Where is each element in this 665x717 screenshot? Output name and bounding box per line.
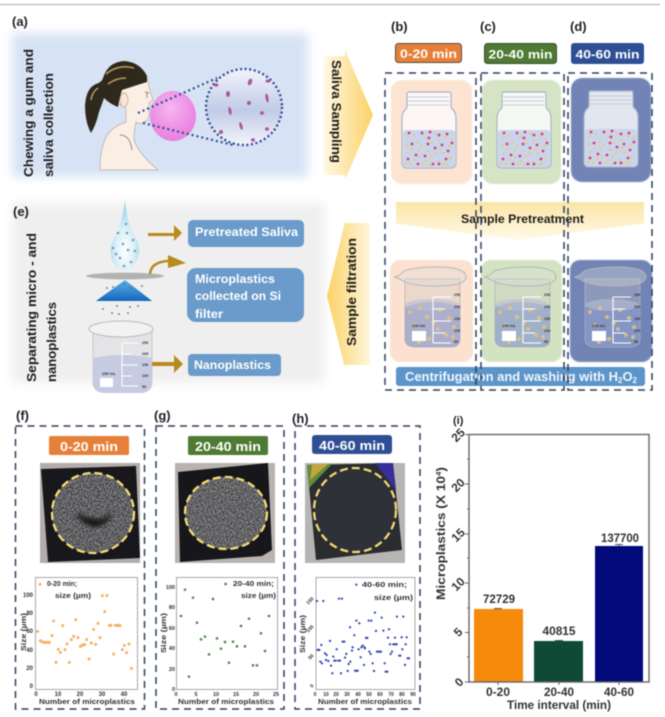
bar value labels: 72729 bbox=[483, 592, 515, 606]
scatter chart h: 100 bbox=[305, 624, 316, 634]
label (g): (g) bbox=[154, 408, 171, 423]
label (d): (d) bbox=[570, 19, 587, 34]
scatter chart g: 0 bbox=[174, 692, 178, 698]
x axis tick labels: 20-40 bbox=[544, 685, 574, 699]
scatter chart g bbox=[159, 578, 279, 706]
scatter chart f: 0 bbox=[30, 684, 34, 690]
icon: collection beaker: 100 bbox=[142, 374, 148, 378]
scatter chart h: 150 bbox=[305, 596, 316, 606]
scatter chart f bbox=[19, 578, 138, 706]
scatter chart g: 60 bbox=[169, 626, 175, 632]
scatter chart g: 25 bbox=[273, 692, 279, 698]
y axis tick labels: 20 bbox=[448, 475, 468, 495]
arrow: sample pretreatment: Sample Pretreatment bbox=[461, 212, 584, 226]
panel: sample c bbox=[480, 19, 562, 362]
panel: filter f bbox=[16, 408, 144, 709]
box: pretreated saliva bbox=[188, 220, 304, 247]
icon: collection beaker: 250 mL bbox=[102, 371, 116, 376]
scatter chart f: Size (µm) bbox=[19, 612, 28, 651]
arrow: to nanoplastics bbox=[152, 355, 183, 373]
scatter chart g: 80 bbox=[169, 605, 175, 611]
badge: 20-40 min: 20-40 min bbox=[195, 439, 261, 454]
scatter chart h: size (µm) bbox=[374, 593, 414, 602]
box: nanoplastics bbox=[188, 354, 281, 376]
scatter chart h: 20 bbox=[333, 692, 339, 698]
scatter chart g: 20 bbox=[169, 667, 175, 673]
arrow: sample filtration: Sample filtration bbox=[344, 238, 359, 346]
scatter chart f: 30 bbox=[99, 692, 106, 698]
heading: chewing a gum: Chewing a gum and bbox=[21, 49, 36, 177]
scatter chart h: 70 bbox=[388, 692, 394, 698]
icon: beaker c bbox=[484, 267, 556, 347]
label (f): (f) bbox=[16, 408, 29, 423]
scatter chart h: 0 bbox=[314, 692, 317, 698]
bar value labels: 137700 bbox=[601, 531, 639, 545]
box: pretreated saliva: Pretreated Saliva bbox=[195, 225, 298, 239]
photo: filter h bbox=[305, 463, 405, 563]
background: jar b bbox=[391, 80, 472, 184]
scatter chart f: 80 bbox=[26, 611, 34, 617]
scatter chart g: 20-40 min; bbox=[233, 581, 274, 588]
badge: 40-60 min: 40-60 min bbox=[319, 438, 385, 453]
icon: beaker d bbox=[574, 267, 646, 347]
bar: centrifugation and washing: 2 bbox=[633, 376, 638, 385]
scatter chart g: 15 bbox=[233, 692, 239, 698]
box: nanoplastics: Nanoplastics bbox=[194, 358, 271, 372]
scatter chart h: 90 bbox=[410, 692, 416, 698]
scatter chart f: 40 bbox=[121, 692, 128, 698]
scatter chart g: Size (µm) bbox=[159, 612, 168, 653]
panel: sample d bbox=[570, 19, 652, 362]
y axis tick labels bbox=[448, 425, 468, 689]
scatter chart f: 10 bbox=[55, 692, 62, 698]
icon: gum bubble bbox=[150, 91, 196, 141]
y axis title: Microplastics (X 10 bbox=[434, 491, 448, 600]
y axis tick labels: 0 bbox=[452, 675, 467, 689]
label (c): (c) bbox=[480, 19, 496, 34]
y axis tick labels: 25 bbox=[448, 425, 468, 445]
data points h bbox=[317, 585, 409, 673]
dashed box d bbox=[568, 73, 652, 390]
badge: 20-40 min: 20-40 min bbox=[488, 48, 552, 62]
badge: 40-60 min: 40-60 min bbox=[576, 48, 640, 62]
x axis tick labels: 0-20 bbox=[486, 685, 510, 699]
scatter chart f: 40 bbox=[26, 648, 34, 654]
scatter chart h: 40-60 min; bbox=[362, 580, 407, 589]
icon: collection beaker: 150 bbox=[142, 363, 148, 367]
icon: blue filter cone bbox=[96, 280, 152, 314]
scatter chart h: 50 bbox=[307, 653, 316, 661]
photo: filter g bbox=[175, 463, 275, 563]
x axis tick labels: 40-60 bbox=[604, 685, 634, 699]
scatter chart h bbox=[298, 578, 416, 706]
scatter chart g: size (µm) bbox=[241, 593, 276, 600]
scatter chart h: 0 bbox=[309, 683, 316, 689]
badge: 0-20 min bbox=[49, 436, 129, 455]
icon: saliva drop bbox=[110, 200, 139, 270]
arrow: to microplastics bbox=[150, 255, 186, 274]
badge: 20-40 min bbox=[188, 436, 268, 455]
box: microplastics collected: filter bbox=[195, 307, 223, 321]
arrow: saliva sampling bbox=[324, 50, 373, 180]
panel: chewing and saliva collection (a) bbox=[12, 14, 308, 177]
icon: saliva jar c bbox=[497, 92, 551, 168]
data points g bbox=[181, 584, 269, 677]
scatter chart g: 100 bbox=[166, 585, 175, 591]
bar: centrifugation and washing: O bbox=[622, 369, 633, 384]
icon: saliva jar d bbox=[584, 91, 638, 167]
y axis tick labels: 10 bbox=[448, 574, 468, 594]
bar chart i bbox=[434, 415, 649, 712]
icon: magnified saliva circle bbox=[138, 69, 282, 145]
scatter chart f: 0 bbox=[34, 692, 38, 698]
scatter chart f: 100 bbox=[23, 593, 34, 599]
bar value labels bbox=[483, 531, 639, 638]
panel: separating micro and nanoplastics (e) bbox=[12, 200, 324, 393]
scatter chart f: 60 bbox=[26, 629, 34, 635]
scatter chart g: 40 bbox=[169, 646, 175, 652]
badge: 0-20 min: 0-20 min bbox=[60, 439, 118, 454]
background: jar d bbox=[571, 78, 651, 182]
y axis title: ) bbox=[434, 467, 448, 472]
bars bbox=[474, 544, 643, 682]
scatter chart g: 20 bbox=[253, 692, 259, 698]
icon: collection beaker: 200 bbox=[142, 352, 148, 356]
scatter chart f: 20 bbox=[26, 666, 34, 672]
scatter chart g: Number of microplastics bbox=[178, 697, 274, 706]
heading: separating: Separating micro - and bbox=[24, 233, 39, 382]
y axis tick labels: 5 bbox=[451, 625, 466, 639]
icon: woman profile bbox=[85, 61, 158, 170]
scatter chart h: 80 bbox=[399, 692, 405, 698]
icon: beaker b bbox=[394, 267, 466, 347]
box: microplastics collected bbox=[187, 268, 304, 322]
scatter chart h: 30 bbox=[344, 692, 350, 698]
x axis title: Time interval (min) bbox=[507, 698, 611, 712]
scatter chart g: 5 bbox=[194, 692, 198, 698]
arrow: to pretreated saliva bbox=[148, 225, 182, 241]
arrow: sample pretreatment bbox=[392, 202, 647, 240]
y axis tick labels: 15 bbox=[448, 525, 468, 545]
panel: sample b bbox=[390, 19, 473, 362]
icon: collection beaker bbox=[89, 321, 153, 393]
arrow: saliva sampling: Saliva Sampling bbox=[329, 60, 344, 163]
bar: centrifugation and washing bbox=[396, 367, 645, 386]
scatter chart h: 50 bbox=[366, 692, 372, 698]
badge: 0-20 min bbox=[396, 44, 462, 62]
scatter chart g: 10 bbox=[213, 692, 219, 698]
scatter chart f: 0-20 min; bbox=[47, 581, 77, 588]
badge: 40-60 min bbox=[571, 43, 644, 64]
dashed box c bbox=[481, 73, 564, 390]
badge: 0-20 min: 0-20 min bbox=[400, 47, 457, 61]
y axis title: 4 bbox=[436, 471, 443, 476]
scatter chart h: Number of microplastics bbox=[318, 697, 412, 706]
scatter chart f: Number of microplastics bbox=[39, 697, 135, 706]
icon: filter disk bbox=[86, 273, 164, 279]
x axis tick labels bbox=[486, 685, 634, 699]
icon: saliva jar b bbox=[402, 92, 456, 168]
background: beaker d bbox=[570, 260, 652, 362]
scatter chart f: 20 bbox=[77, 692, 84, 698]
icon: collection beaker: 250 bbox=[142, 341, 148, 345]
scatter chart h: 10 bbox=[323, 692, 329, 698]
scatter chart h: 60 bbox=[377, 692, 383, 698]
box: microplastics collected: Microplastics bbox=[195, 272, 275, 286]
arrow: sample filtration bbox=[327, 222, 370, 368]
icon: collection beaker: 50 bbox=[142, 385, 146, 389]
scatter chart h: 40 bbox=[355, 692, 361, 698]
background: beaker b bbox=[390, 260, 473, 362]
label (a): (a) bbox=[12, 14, 28, 29]
label (i): (i) bbox=[453, 415, 464, 427]
data points f bbox=[38, 584, 131, 668]
bar: centrifugation and washing: 2 bbox=[618, 376, 623, 385]
scatter chart f: size (µm) bbox=[55, 593, 91, 600]
dashed box b bbox=[385, 73, 476, 390]
bar value labels: 40815 bbox=[542, 624, 576, 638]
badge: 40-60 min bbox=[312, 435, 392, 454]
label (b): (b) bbox=[391, 19, 408, 34]
panel: filter g bbox=[154, 408, 284, 709]
label (e): (e) bbox=[13, 204, 29, 219]
box: microplastics collected: collected on Si bbox=[195, 289, 281, 303]
heading: nanoplastics: nanoplastics bbox=[44, 302, 59, 382]
panel: filter h bbox=[292, 411, 420, 709]
heading: saliva collection: saliva collection bbox=[41, 73, 56, 177]
badge: 20-40 min bbox=[484, 44, 556, 64]
scatter chart h: Size (µm) bbox=[298, 614, 307, 653]
bar: centrifugation and washing: Centrifugation and washing with H bbox=[405, 369, 619, 384]
photo: filter f bbox=[40, 463, 140, 563]
scatter chart g: 0 bbox=[172, 687, 175, 693]
background: beaker c bbox=[481, 260, 562, 362]
label (h): (h) bbox=[292, 411, 309, 426]
background: jar c bbox=[482, 80, 561, 184]
